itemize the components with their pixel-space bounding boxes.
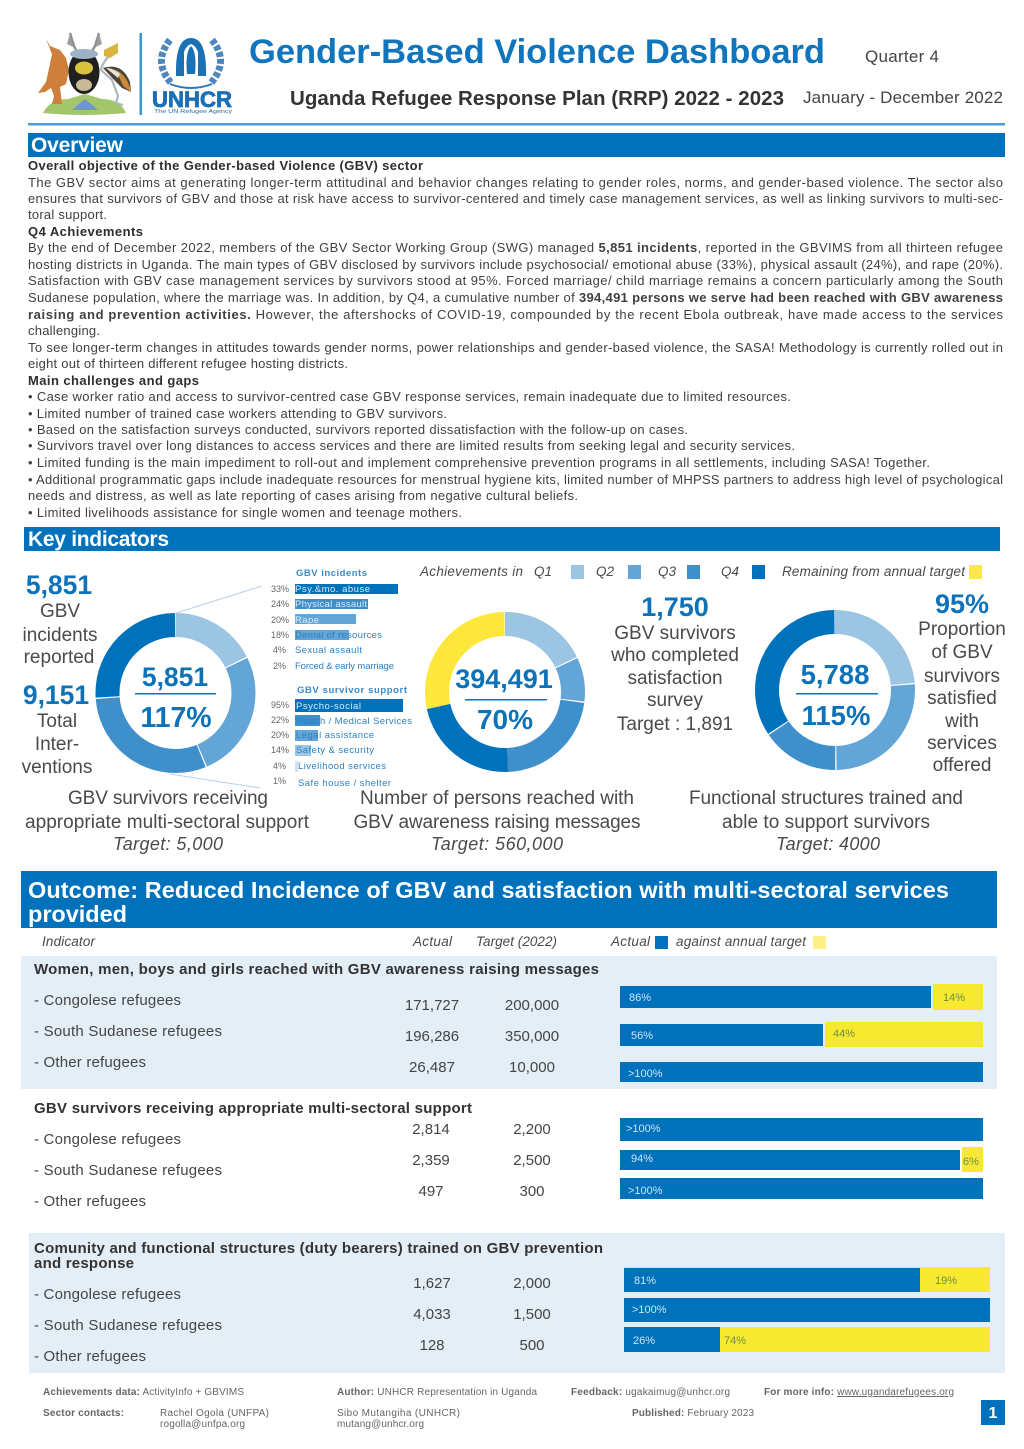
caption: functional structures: Target: 4000 [776,834,880,854]
bars: community structures: >100% [632,1304,667,1316]
caption: persons reached: GBV awareness raising messages [354,812,640,833]
panel: overview text: toral support. [28,207,107,222]
bar chart: GBV survivor support: 22% [271,715,289,725]
panel: overview text: Main challenges and gaps [28,373,199,388]
bar chart: GBV incidents: 20% [271,615,289,625]
stat: survivors completing satisfaction survey: GBV survivors [614,623,736,644]
stat: survivors completing satisfaction survey: who completed [610,645,739,666]
bar chart: GBV incidents: Rape [295,615,319,626]
donut chart: functional structures: 115% [802,700,870,731]
bar chart: GBV incidents: Sexual assault [295,645,362,656]
date range: January - December 2022 [803,88,1003,107]
bar chart: GBV incidents: GBV incidents [296,568,367,579]
panel: overview text: raising and prevention activities. However, the aftershocks of COVID-19, compounded by the recent Ebola outbreak, have made access to the services [28,307,1003,322]
legend: quarters: Remaining from annual target [782,564,966,579]
panel: multi-sectoral support: 2,359 [412,1152,450,1169]
panel: community structures [29,1233,1005,1373]
panel: awareness raising: - Other refugees [34,1054,146,1071]
heading: Key indicators [24,527,1000,551]
panel: community structures: 500 [519,1337,545,1354]
bars: awareness raising: 56% [631,1030,653,1042]
logo divider [140,33,142,115]
stat: GBV incidents reported [22,570,98,668]
panel: overview text: Sudanese population, where the marriage was. In addition, by Q4, a cumulative number of 394,491 persons we serve had been reached with GBV awareness [28,290,1003,305]
stat: total interventions: ventions [22,757,92,778]
caption: survivors receiving support: Target: 5,000 [113,834,223,854]
panel: overview text: needs and distress, as well as late reporting of cases arising from negative cultural beliefs. [28,488,578,503]
panel: awareness raising: 10,000 [509,1059,555,1076]
caption: functional structures: Functional structures trained and [689,788,963,809]
bar chart: GBV incidents: 24% [271,599,289,609]
footer [43,1387,954,1430]
heading: Overview [28,133,1005,157]
stat: proportion satisfied: services [927,733,997,754]
footer: Published: February 2023 [632,1408,754,1419]
donut chart: GBV survivors receiving support [108,625,244,761]
quarter label: Quarter 4 [865,47,939,66]
bars: awareness raising [620,984,983,1082]
connector lines [170,586,262,788]
panel: overview text: To see longer-term changes in attitudes towards gender norms, power relationships and gender-based violence, the SASA! Methodology is currently rolled out in [28,340,1003,355]
bars: community structures: 74% [724,1335,746,1347]
bar chart: GBV survivor support: Health / Medical Services [296,716,412,727]
panel: overview text [28,158,1003,520]
panel: overview text: Overall objective of the Gender-based Violence (GBV) sector [28,158,423,173]
panel: multi-sectoral support: 2,500 [513,1152,551,1169]
stat: survivors completing satisfaction survey: Target : 1,891 [617,714,733,735]
panel: overview text: • Limited number of trained case workers attending to GBV survivors. [28,406,447,421]
bar chart: GBV incidents: 4% [273,645,286,655]
bars: community structures [624,1267,990,1352]
table header and legend: Actual [610,934,651,949]
panel: overview text: • Limited funding is the main impediment to roll-out and implement comprehensive prevention programs in all settlements, including SASA! Together. [28,455,930,470]
stat: total interventions: Total [37,711,77,732]
logo: UNHCR [152,38,233,115]
logo: UNHCR: UNHCR [152,87,232,112]
stat: survivors completing satisfaction survey: 1,750 [641,592,709,622]
legend: quarters: Q2 [596,564,615,579]
stat: survivors completing satisfaction survey: satisfaction [627,668,723,689]
title: Gender-Based Violence Dashboard [249,33,825,71]
bar chart: GBV survivor support: GBV survivor support [297,685,408,696]
panel: awareness raising: 26,487 [409,1059,455,1076]
heading: Overview: Overview [31,134,124,157]
panel: overview text: ensures that survivors of GBV and those at risk have access to survivor-centered and timely case management services, as well as linking survivors to multi-sec- [28,191,1003,206]
donut chart: persons reached: 394,491 [455,664,553,694]
caption: persons reached: Number of persons reached with [360,788,634,809]
bar chart: GBV survivor support: Legal assistance [296,730,374,741]
bars: awareness raising: 86% [629,992,651,1004]
stat: total interventions: 9,151 [23,680,89,710]
stat: GBV incidents reported: reported [24,647,94,668]
donut chart: persons reached: 70% [477,704,533,735]
panel: overview text: The GBV sector aims at generating longer-term attitudinal and behavior changes relating to gender roles, norms, and gender-based violence. The sector also [28,175,1003,190]
panel: awareness raising: - Congolese refugees [34,992,181,1009]
stat: proportion satisfied: survivors [924,666,1000,687]
panel: multi-sectoral support: - South Sudanese refugees [34,1162,222,1179]
donut chart: GBV survivors receiving support: 5,851 [142,662,208,692]
bar chart: GBV survivor support: 20% [271,730,289,740]
stat: proportion satisfied: Proportion [918,619,1006,640]
bars: multi-sectoral support: 6% [963,1156,979,1168]
panel: awareness raising: 350,000 [505,1028,559,1045]
logo: UNHCR: The UN Refugee Agency [154,109,233,115]
panel: multi-sectoral support [34,1100,983,1210]
bars: awareness raising: >100% [628,1068,663,1080]
panel: overview text: Q4 Achievements [28,224,143,239]
stat: total interventions: Inter- [35,734,79,755]
legend: quarters [419,564,982,579]
bar chart: GBV incidents [271,568,398,672]
stat: survivors completing satisfaction survey: survey [647,690,703,711]
panel: multi-sectoral support: - Congolese refugees [34,1131,181,1148]
bar chart: GBV incidents: Psy.&mo. abuse [295,584,370,595]
bars: awareness raising: 44% [833,1028,855,1040]
bar chart: GBV survivor support [271,685,412,789]
legend: quarters: Achievements in [419,564,523,579]
panel: overview text: • Survivors travel over long distances to access services and there are limited results from seeking legal and security services. [28,438,795,453]
footer: Author: UNHCR Representation in Uganda [337,1387,537,1398]
footer: rogolla@unfpa.org [160,1419,245,1430]
panel: overview text: • Based on the satisfaction surveys conducted, survivors reported dissatisfaction with the follow-up on cases. [28,422,688,437]
bar chart: GBV survivor support: Psycho-social [296,701,361,712]
header rule [28,123,1005,126]
caption: functional structures [689,788,963,854]
footer: Feedback: ugakaimug@unhcr.org [571,1387,730,1398]
stat: proportion satisfied [918,589,1006,776]
table header and legend: Indicator [42,934,96,949]
bar chart: GBV incidents: Denial of resources [295,630,382,641]
panel: multi-sectoral support: 2,200 [513,1121,551,1138]
panel: overview text: eight out of thirteen different refugee hosting districts. [28,356,348,371]
heading: Outcome: Outcome: Reduced Incidence of GBV and satisfaction with multi-sectoral services [28,877,949,903]
stat: total interventions [22,680,92,778]
footer: Rachel Ogola (UNFPA) [160,1408,269,1419]
stat: survivors completing satisfaction survey [610,592,739,735]
panel: awareness raising [21,956,997,1089]
page number: 1 [989,1405,998,1422]
panel: overview text: By the end of December 2022, members of the GBV Sector Working Group (SWG) managed 5,851 incidents, reported in the GBVIMS from all thirteen refugee [28,240,1003,255]
panel: community structures: 1,627 [413,1275,451,1292]
donut chart: GBV survivors receiving support: 117% [140,702,212,734]
bar chart: GBV survivor support: Safety & security [296,745,374,756]
stat: GBV incidents reported: incidents [22,625,98,646]
heading: Key indicators: Key indicators [28,528,169,551]
table header and legend: Target (2022) [476,934,557,949]
caption: persons reached [354,788,640,854]
panel: overview text: hosting districts in Uganda. The main types of GBV disclosed by survivors include psychosocial/ emotional abuse (33%), physical assault (24%), and rape (20%). [28,257,1003,272]
caption: survivors receiving support [25,788,310,854]
panel: multi-sectoral support: 300 [519,1183,545,1200]
bar chart: GBV survivor support: Safe house / shelter [298,778,391,789]
donut chart: persons reached [437,624,573,760]
panel: multi-sectoral support: 2,814 [412,1121,450,1138]
bar chart: GBV incidents: Physical assault [295,599,367,610]
heading: Outcome [21,871,997,928]
stat: proportion satisfied: of GBV [931,642,993,663]
panel: community structures: 4,033 [413,1306,451,1323]
stat: proportion satisfied: offered [933,755,991,776]
legend: quarters: Q3 [658,564,677,579]
panel: community structures: - Congolese refugees [34,1286,181,1303]
stat: proportion satisfied: 95% [935,589,989,619]
footer: Achievements data: ActivityInfo + GBVIMS [43,1387,244,1398]
table header and legend [42,934,826,949]
logo: Uganda coat of arms [38,33,131,115]
heading: Outcome: provided [28,901,127,927]
donut chart: functional structures [767,622,903,758]
panel: multi-sectoral support: GBV survivors receiving appropriate multi-sectoral support [34,1100,472,1117]
stat: proportion satisfied: with [944,711,979,732]
panel: community structures: 2,000 [513,1275,551,1292]
footer: Sector contacts: [43,1408,124,1419]
bar chart: GBV incidents: Forced & early marriage [295,661,394,672]
table header and legend: Actual [412,934,453,949]
bars: multi-sectoral support [620,1118,983,1199]
table header and legend: against annual target [676,934,807,949]
bar chart: GBV survivor support: Livelihood services [298,761,386,772]
footer: For more info: www.ugandarefugees.org [764,1387,954,1398]
panel: community structures: and response [34,1255,134,1272]
donut chart: functional structures: 5,788 [801,659,869,690]
stat: GBV incidents reported: 5,851 [26,570,92,600]
bars: community structures: 26% [633,1335,655,1347]
bar chart: GBV survivor support: 4% [273,761,286,771]
panel: community structures: 1,500 [513,1306,551,1323]
legend: quarters: Q1 [534,564,552,579]
stat: GBV incidents reported: GBV [40,601,80,622]
legend: quarters: Q4 [721,564,739,579]
bar chart: GBV incidents: 18% [271,630,289,640]
bar chart: GBV survivor support: 95% [271,700,289,710]
panel: overview text: Satisfaction with GBV case management services by survivors stood at 95%. Forced marriage/ child marriage remains a concern particularly among the South [28,273,1003,288]
panel: awareness raising: Women, men, boys and girls reached with GBV awareness raising messages [34,961,599,978]
bars: multi-sectoral support: >100% [628,1185,663,1197]
panel: multi-sectoral support: 497 [418,1183,444,1200]
bar chart: GBV incidents: 2% [273,661,286,671]
panel: awareness raising: 200,000 [505,997,559,1014]
stat: proportion satisfied: satisfied [927,688,997,709]
subtitle: Uganda Refugee Response Plan (RRP) 2022 - 2023 [290,87,784,110]
footer: mutang@unhcr.org [337,1419,424,1430]
page number [981,1400,1005,1425]
caption: persons reached: Target: 560,000 [431,834,563,854]
panel: overview text: challenging. [28,323,100,338]
panel: awareness raising: 171,727 [405,997,459,1014]
panel: community structures: - South Sudanese refugees [34,1317,222,1334]
panel: overview text: • Limited livelihoods assistance for single women and teenage mothers. [28,505,462,520]
bars: community structures: 81% [634,1275,656,1287]
caption: survivors receiving support: GBV survivors receiving [68,788,268,809]
bars: community structures: 19% [935,1275,957,1287]
caption: survivors receiving support: appropriate multi-sectoral support [25,812,310,833]
panel: community structures: - Other refugees [34,1348,146,1365]
bars: multi-sectoral support: 94% [631,1153,653,1165]
panel: awareness raising: - South Sudanese refugees [34,1023,222,1040]
caption: functional structures: able to support survivors [722,812,930,833]
panel: awareness raising: 196,286 [405,1028,459,1045]
bar chart: GBV survivor support: 1% [273,776,286,786]
bar chart: GBV incidents: 33% [271,584,289,594]
panel: multi-sectoral support: - Other refugees [34,1193,146,1210]
footer: Sibo Mutangiha (UNHCR) [337,1408,460,1419]
panel: overview text: • Additional programmatic gaps include inadequate resources for menstrual hygiene kits, limited number of MHPSS partners to address high level of psychological [28,472,1003,487]
bars: awareness raising: 14% [943,992,965,1004]
bars: multi-sectoral support: >100% [626,1123,661,1135]
panel: overview text: • Case worker ratio and access to survivor-centred case GBV response services, remain inadequate due to limited resources. [28,389,791,404]
panel: community structures: 128 [419,1337,445,1354]
bar chart: GBV survivor support: 14% [271,745,289,755]
panel: community structures: Comunity and functional structures (duty bearers) trained on GBV prevention [34,1240,603,1257]
